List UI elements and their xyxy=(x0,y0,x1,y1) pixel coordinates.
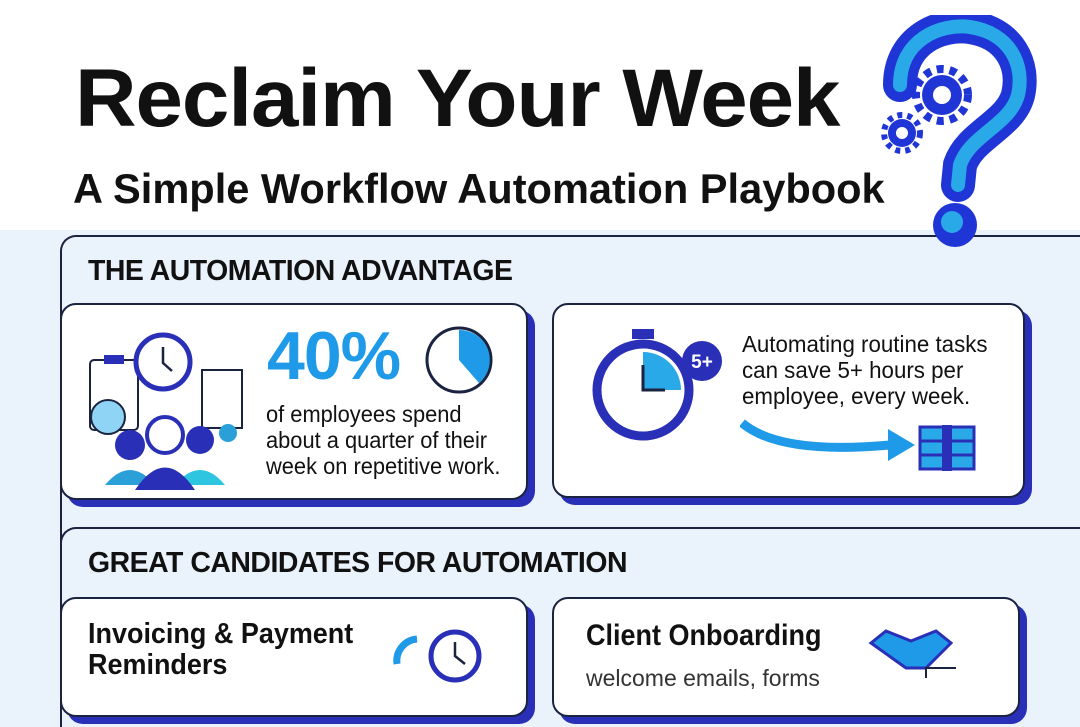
text: automating routine tasks: Automating routine tasks xyxy=(742,331,988,357)
icon: employees with clock and documents xyxy=(89,332,243,490)
panel: 40% stat xyxy=(60,303,528,500)
heading: the automation advantage: THE AUTOMATION ADVANTAGE xyxy=(88,255,513,287)
text: onboarding detail: welcome emails, forms xyxy=(586,665,820,691)
icon: question mark with gears xyxy=(881,15,1037,247)
text: automating routine tasks: can save 5+ hours per xyxy=(742,357,963,383)
panel: 5+ hours stat xyxy=(552,303,1025,498)
icon: quarter clock xyxy=(426,326,492,394)
stat: 40%: 40% xyxy=(267,318,400,394)
text: employees description xyxy=(266,401,500,479)
icon: stopwatch 5+ xyxy=(592,329,722,440)
section 2 frame xyxy=(60,527,1080,727)
text: automating routine tasks: employee, every week. xyxy=(742,383,970,409)
icon: stopwatch 5+: 5+ xyxy=(691,352,713,373)
subtitle: A Simple Workflow Automation Playbook xyxy=(73,165,885,212)
section 1 frame xyxy=(60,235,1080,635)
icon: cycle clock xyxy=(393,630,482,682)
text: invoicing title: Reminders xyxy=(88,649,227,681)
text: employees description: about a quarter of their xyxy=(266,427,487,453)
heading: great candidates for automation: GREAT CANDIDATES FOR AUTOMATION xyxy=(88,547,627,579)
icon: handshake xyxy=(868,629,956,678)
panel: client onboarding xyxy=(552,597,1020,717)
panel: invoicing xyxy=(60,597,528,717)
text: employees description: week on repetitive work. xyxy=(266,453,500,479)
text: employees description: of employees spend xyxy=(266,401,462,427)
text: invoicing title xyxy=(88,618,353,681)
white top band xyxy=(0,0,1080,230)
title: Reclaim Your Week xyxy=(75,53,839,144)
arrow: to money xyxy=(740,420,915,461)
text: onboarding title: Client Onboarding xyxy=(586,619,821,652)
icon: money stack xyxy=(918,425,976,471)
text: automating routine tasks xyxy=(742,331,988,409)
text: invoicing title: Invoicing & Payment xyxy=(88,618,353,650)
